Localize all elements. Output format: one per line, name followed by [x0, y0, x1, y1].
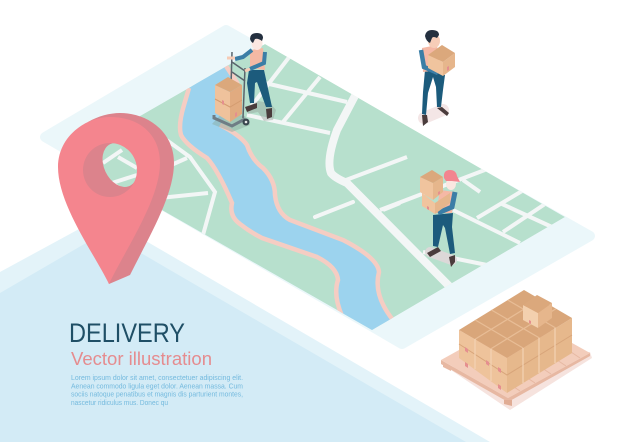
head [428, 34, 440, 48]
pallet [441, 315, 590, 406]
map roads [103, 56, 552, 292]
arm [421, 50, 438, 73]
figure: courier with hand truck [212, 33, 276, 132]
shoes [427, 247, 441, 257]
head [252, 36, 262, 50]
body text: nascetur ridiculus mus. Donec qu [71, 398, 168, 407]
body text: sociis natoque penatibus et magnis dis parturient montes, [71, 390, 243, 398]
legs [433, 213, 455, 254]
body text [71, 373, 243, 407]
torso [250, 48, 265, 70]
boxes on truck [215, 77, 242, 122]
river [180, 64, 393, 335]
top single box [523, 295, 552, 328]
shadow [430, 252, 452, 260]
face [446, 178, 456, 190]
subtitle: Vector illustration [71, 348, 212, 369]
stacked boxes block [459, 290, 572, 393]
title: DELIVERY [69, 318, 185, 348]
arms [235, 50, 252, 59]
shoes [422, 115, 428, 126]
boxes [422, 193, 435, 214]
shadow [212, 113, 250, 132]
icon: location pin [58, 113, 174, 284]
pallet of boxes [441, 290, 592, 410]
panel: device rim [45, 30, 590, 344]
torso [436, 190, 455, 213]
arm [438, 192, 455, 213]
shoes [245, 103, 257, 112]
panel: lower background band [0, 216, 490, 442]
pallet shadow [448, 352, 592, 410]
cap [444, 170, 460, 182]
legs [422, 70, 445, 115]
box [428, 55, 443, 76]
panel: map [69, 44, 565, 335]
body text: Lorem ipsum dolor sit amet, consectetuer adipiscing elit. [71, 373, 243, 382]
figure: courier carrying one box [421, 30, 455, 126]
legs [247, 70, 272, 107]
figure: courier carrying two boxes [420, 170, 460, 267]
hand truck [214, 52, 245, 126]
shadow [424, 110, 443, 118]
body text: Aenean commodo ligula eget dolor. Aenean massa. Cum [71, 382, 243, 390]
torso [422, 45, 440, 72]
